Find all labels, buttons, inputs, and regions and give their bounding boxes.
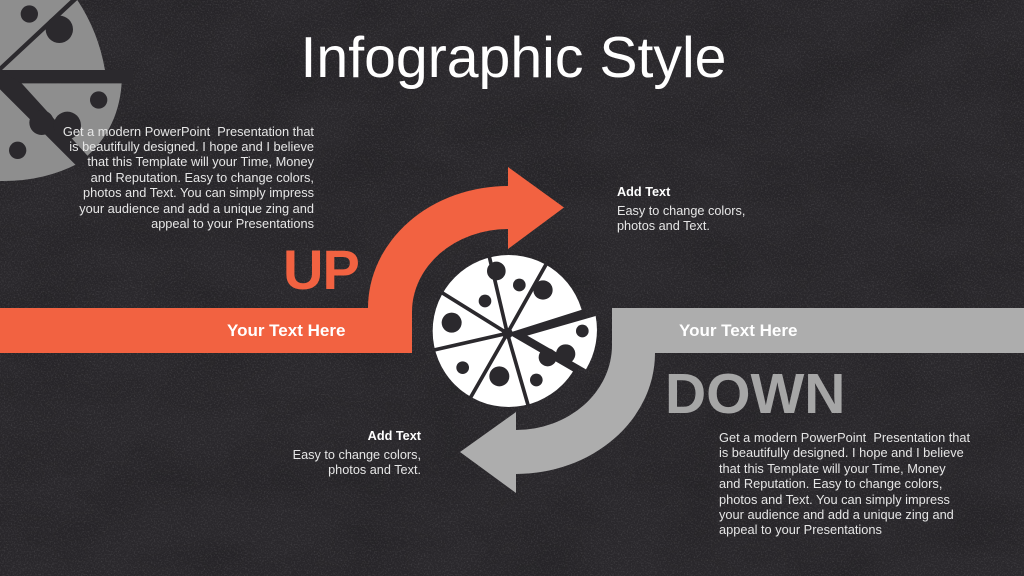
heading: UP: UP [283,238,359,301]
title: Infographic Style [300,26,726,90]
text block: upper left description: Get a modern PowerPoint Presentation that is beautifully designed. I hope and I believe that this Template will your Time, Money and Reputation. Easy to change colors, photos and Text. You can simply impress your audience and add a unique zing and appeal to your Presentations [63,124,314,231]
label: orange bar text: Your Text Here [227,321,345,340]
text block: lower right description: Get a modern PowerPoint Presentation that is beautifully designed. I hope and I believe that this Template will your Time, Money and Reputation. Easy to change colors, photos and Text. You can simply impress your audience and add a unique zing and appeal to your Presentations [719,430,970,537]
text block: lower left add text: Add Text Easy to change colors, photos and Text. [293,429,421,477]
icon: faded pizza slices top-left [0,0,133,181]
heading: DOWN: DOWN [665,362,845,426]
label: gray bar text: Your Text Here [679,321,797,340]
arrow: orange up arrow [0,167,564,353]
icon: pizza with slices [433,255,597,407]
text block: upper right add text: Add Text Easy to change colors, photos and Text. [617,185,745,233]
arrow: gray down arrow [460,308,1024,493]
